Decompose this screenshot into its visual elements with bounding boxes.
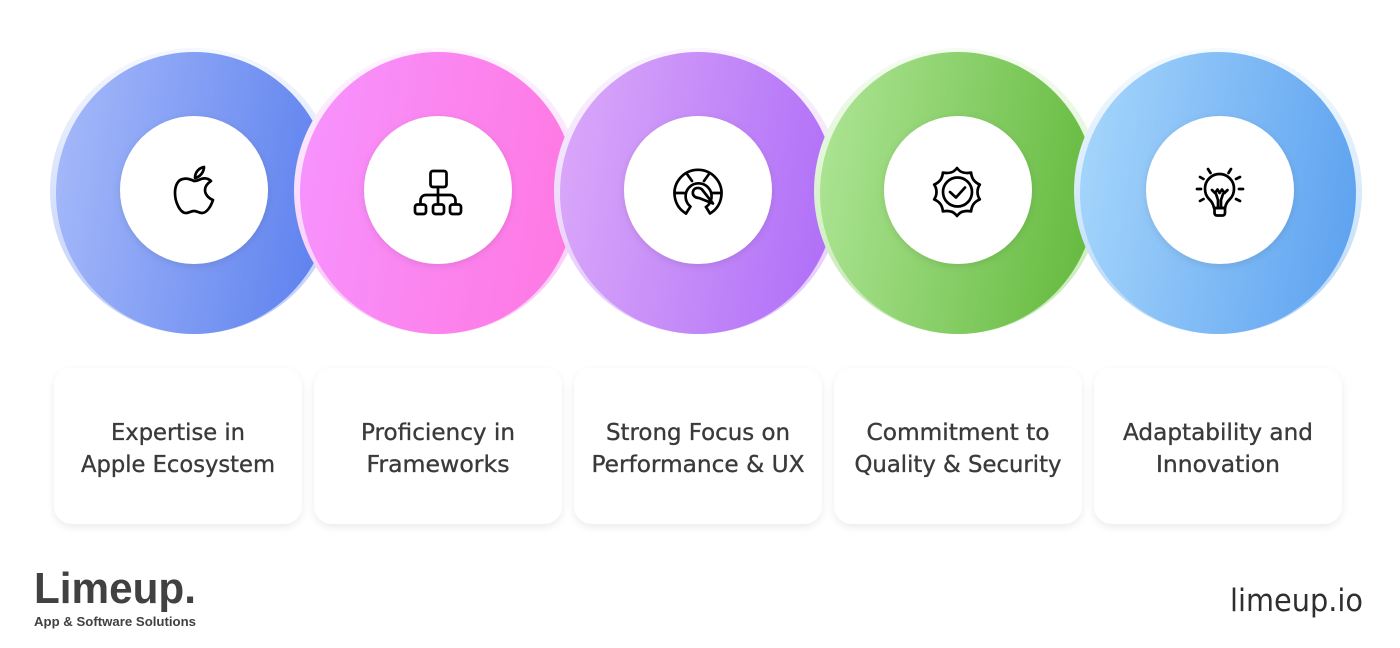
- icon: gauge: [674, 170, 721, 214]
- panel: circle performance: [554, 48, 842, 334]
- website address: limeup.io: [1230, 583, 1363, 619]
- logo: Limeup: Limeup.: [34, 564, 196, 613]
- card: Expertise in Apple Ecosystem: Apple Ecosystem: [81, 452, 275, 478]
- card: Proficiency in Frameworks: Frameworks: [366, 452, 510, 478]
- panel: circle Apple ecosystem: [50, 48, 338, 334]
- card: Expertise in Apple Ecosystem: Expertise in: [111, 420, 245, 446]
- icon: light bulb: [1197, 169, 1243, 216]
- icon: quality badge: [934, 168, 980, 216]
- card: Adaptability and Innovation: Innovation: [1156, 452, 1280, 478]
- card: Proficiency in Frameworks: [314, 368, 562, 524]
- panel: circle frameworks: [294, 48, 582, 334]
- icon: hierarchy: [415, 171, 461, 214]
- card: Expertise in Apple Ecosystem: [54, 368, 302, 524]
- card: Adaptability and Innovation: Adaptability and: [1123, 420, 1313, 446]
- panel: circle innovation: [1074, 48, 1362, 334]
- logo: Limeup: App & Software Solutions: [34, 614, 196, 629]
- card: Strong Focus on Performance & UX: Performance & UX: [592, 452, 805, 478]
- card: Proficiency in Frameworks: Proficiency in: [361, 420, 515, 446]
- panel: circle quality: [814, 48, 1102, 334]
- icon: apple: [175, 167, 213, 213]
- card: Strong Focus on Performance & UX: Strong Focus on: [606, 420, 790, 446]
- card: Adaptability and Innovation: [1094, 368, 1342, 524]
- card: Commitment to Quality & Security: Commitment to: [866, 420, 1050, 446]
- card: Strong Focus on Performance & UX: [574, 368, 822, 524]
- card: Commitment to Quality & Security: Quality & Security: [854, 452, 1062, 478]
- card: Commitment to Quality & Security: [834, 368, 1082, 524]
